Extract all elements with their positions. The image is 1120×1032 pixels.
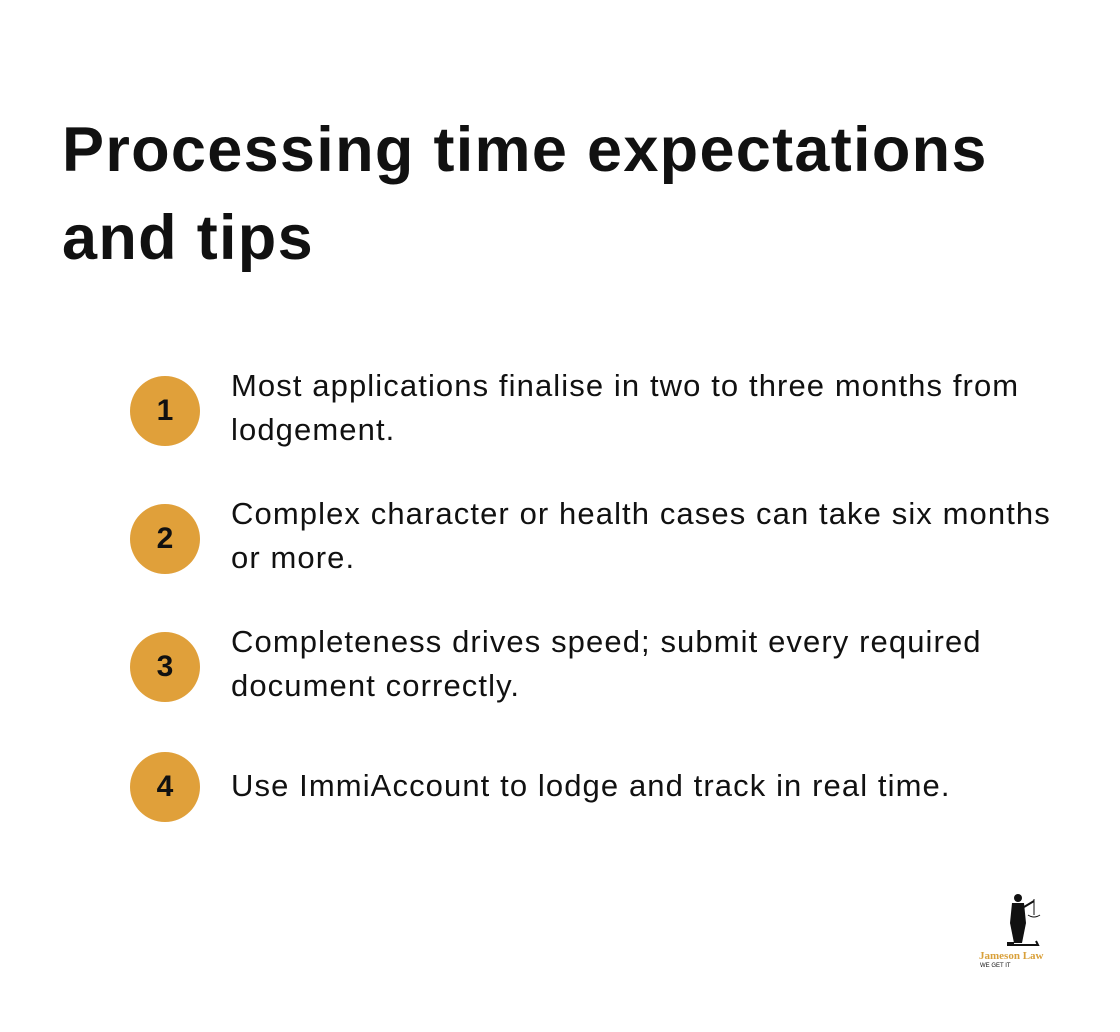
text 1: Most applications finalise in two to three months from: [231, 368, 1019, 403]
badge 3: [130, 632, 200, 702]
badge 4: 4: [157, 770, 173, 803]
title: [62, 115, 988, 273]
text 3: [231, 624, 982, 703]
text 2: or more.: [231, 540, 355, 575]
item 3: [130, 624, 982, 703]
text 1: [231, 368, 1019, 447]
badge 4: [130, 752, 200, 822]
text 2: Complex character or health cases can take six months: [231, 496, 1051, 531]
badge 1: 1: [157, 394, 173, 427]
text 3: document correctly.: [231, 668, 520, 703]
badge 2: [130, 504, 200, 574]
title: and tips: [62, 203, 314, 273]
logo: WE GET IT: [980, 963, 1011, 969]
text 4: Use ImmiAccount to lodge and track in real time.: [231, 768, 951, 803]
badge 1: [130, 376, 200, 446]
badge 3: 3: [157, 650, 173, 683]
text 2: [231, 496, 1051, 575]
logo text: Jameson Law: [979, 950, 1043, 962]
item 2: [130, 496, 1051, 575]
icon: justice figure: [1007, 894, 1040, 946]
title: Processing time expectations: [62, 115, 988, 185]
logo: [979, 894, 1044, 969]
item 4: [130, 752, 951, 822]
text 1: lodgement.: [231, 412, 395, 447]
badge 2: 2: [157, 522, 173, 555]
text 3: Completeness drives speed; submit every required: [231, 624, 982, 659]
item 1: [130, 368, 1019, 447]
